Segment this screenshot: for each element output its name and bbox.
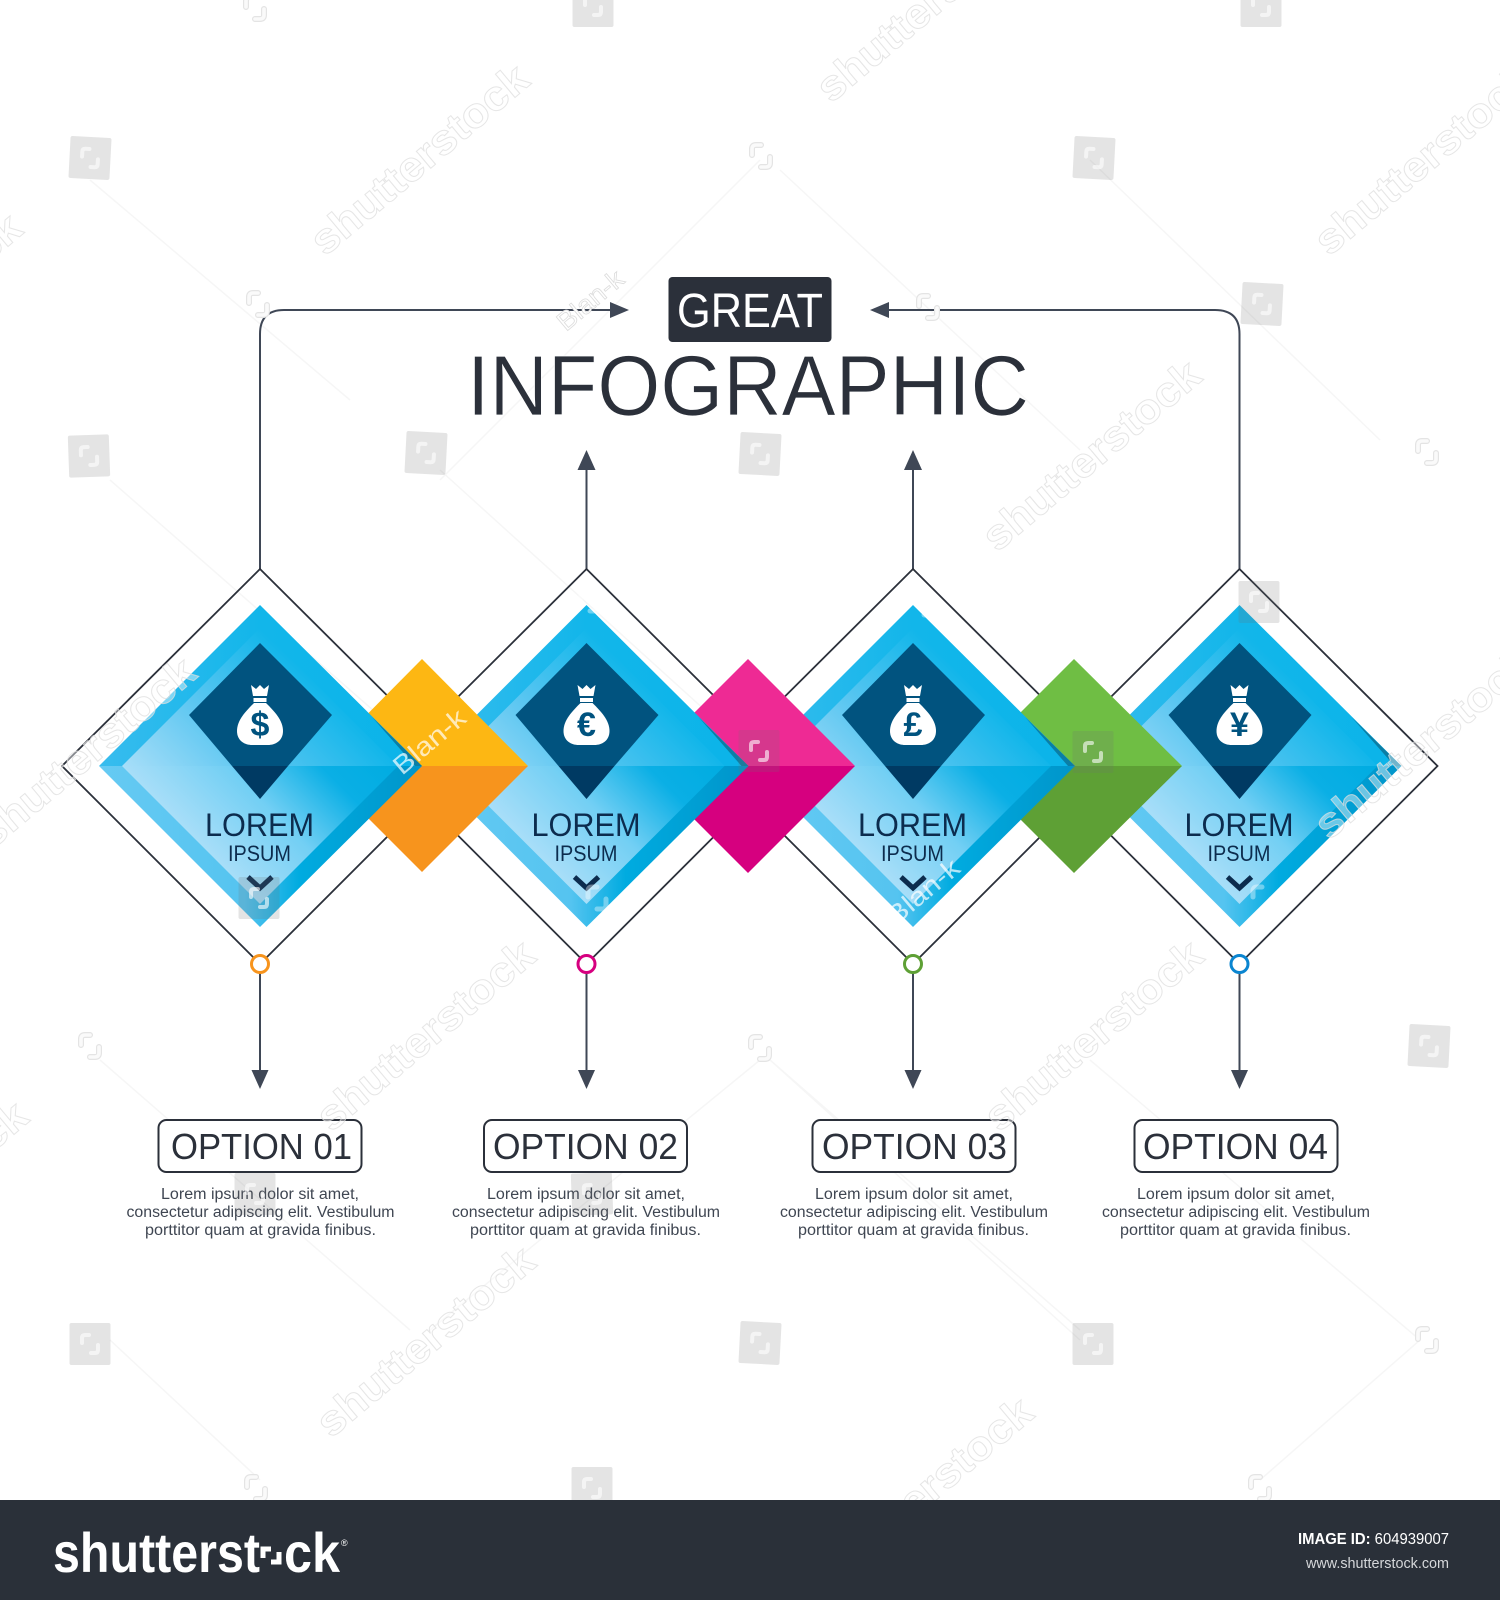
icon: yen money bag: ¥ <box>1230 706 1249 744</box>
step 1 diamond: dollar: LOREM <box>205 807 314 843</box>
icon: yen money bag <box>1216 685 1262 745</box>
step 3 diamond: pound: IPSUM <box>881 841 944 866</box>
watermark text: shutterstock <box>301 54 538 264</box>
watermark text: shutterstock <box>973 350 1210 560</box>
icon: euro money bag: € <box>577 706 596 744</box>
icon: euro money bag <box>564 685 610 745</box>
step 3 diamond: pound <box>752 605 1075 927</box>
step 1 diamond: dollar: IPSUM <box>228 841 291 866</box>
left connector arrow to title <box>260 302 629 569</box>
option 4 block: OPTION 04 <box>1143 1126 1328 1167</box>
option 1 block: Lorem ipsum dolor sit amet, <box>161 1186 359 1203</box>
icon: pound money bag <box>890 685 936 745</box>
connector diamond: orange <box>316 659 528 872</box>
site url: www.shutterstock.com <box>1305 1555 1449 1572</box>
arrow up from step 3 <box>904 450 922 569</box>
image id: IMAGE ID: 604939007 <box>1298 1531 1449 1548</box>
footer logo: ® <box>341 1538 348 1548</box>
watermark text: Blan-k <box>881 852 967 931</box>
option 2 block: consectetur adipiscing elit. Vestibulum <box>452 1204 720 1221</box>
footer logo: shutterst <box>53 1521 260 1584</box>
down arrow 2 with pink node <box>578 956 595 1089</box>
option 2 block: OPTION 02 <box>493 1126 678 1167</box>
option 4 block: Lorem ipsum dolor sit amet, <box>1137 1186 1335 1203</box>
option 4 block: consectetur adipiscing elit. Vestibulum <box>1102 1204 1370 1221</box>
option 3 block <box>780 1120 1048 1239</box>
option 4 block: porttitor quam at gravida finibus. <box>1120 1222 1351 1239</box>
step 4 diamond: yen: IPSUM <box>1208 841 1270 866</box>
step 1 diamond: dollar <box>99 605 422 927</box>
diamond outlines <box>62 569 1438 964</box>
option 2 block <box>452 1120 720 1239</box>
footer bar <box>0 1500 1500 1600</box>
step 4 diamond: yen <box>1078 605 1402 927</box>
title: INFOGRAPHIC: INFOGRAPHIC <box>467 339 1029 434</box>
step 3 diamond: pound: LOREM <box>858 807 967 843</box>
option 3 block: consectetur adipiscing elit. Vestibulum <box>780 1204 1048 1221</box>
down arrow 1 with orange node <box>252 956 268 1089</box>
down arrow 4 with blue node <box>1231 956 1248 1089</box>
option 1 block: consectetur adipiscing elit. Vestibulum <box>126 1204 394 1221</box>
option 2 block: porttitor quam at gravida finibus. <box>470 1222 701 1239</box>
watermark text: shutterstock <box>307 1236 544 1446</box>
option 3 block: porttitor quam at gravida finibus. <box>798 1222 1029 1239</box>
icon: dollar money bag <box>237 685 283 745</box>
down arrow 3 with green node <box>904 956 922 1089</box>
step 2 diamond: euro: LOREM <box>532 807 640 843</box>
watermark text: shutterstock <box>307 930 544 1140</box>
watermark text: Blan-k <box>387 702 473 781</box>
step 2 diamond: euro: IPSUM <box>554 841 618 866</box>
option 4 block <box>1102 1120 1370 1239</box>
step 2 diamond: euro <box>426 605 748 927</box>
right connector arrow to title <box>870 302 1240 569</box>
watermark text: shutterstock <box>975 930 1212 1140</box>
option 1 block: OPTION 01 <box>171 1126 352 1167</box>
icon: pound money bag: £ <box>904 706 923 744</box>
option 2 block: Lorem ipsum dolor sit amet, <box>487 1186 685 1203</box>
connector diamond: pink <box>641 659 855 873</box>
title badge: GREAT: GREAT <box>677 285 823 338</box>
arrow up from step 2 <box>578 450 596 569</box>
step 4 diamond: yen: LOREM <box>1184 807 1294 843</box>
icon: dollar money bag: $ <box>251 706 270 744</box>
option 1 block <box>126 1120 394 1239</box>
option 1 block: porttitor quam at gravida finibus. <box>145 1222 376 1239</box>
option 3 block: Lorem ipsum dolor sit amet, <box>815 1186 1013 1203</box>
footer logo: ck <box>284 1521 341 1584</box>
connector diamond: green <box>967 659 1182 873</box>
watermark text: Blan-k <box>551 263 630 337</box>
watermark text: shutterstock <box>805 1387 1042 1597</box>
option 3 block: OPTION 03 <box>822 1126 1007 1167</box>
